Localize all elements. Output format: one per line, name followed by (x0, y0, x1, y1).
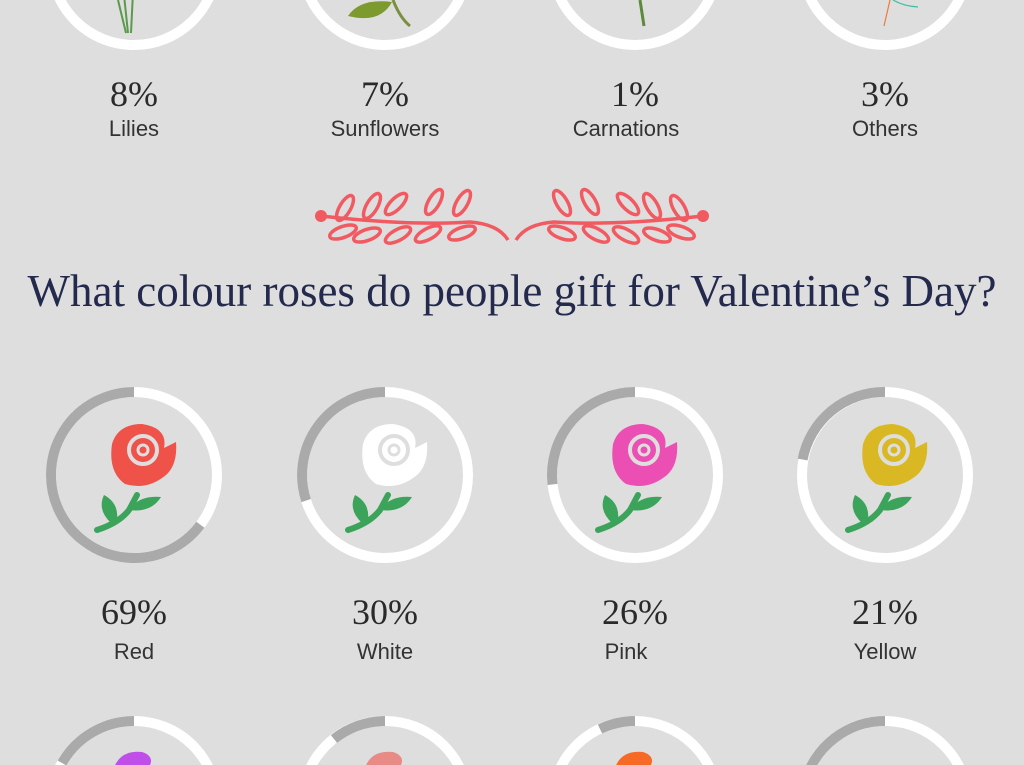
text: pink: 26% (602, 592, 668, 632)
icon: sunflowers ring (302, 0, 468, 45)
title: What colour roses do people gift for Valentine’s Day? (28, 266, 996, 316)
text: red: 69% (101, 592, 167, 632)
text: sunflowers (331, 74, 439, 141)
icon: white rose head (362, 424, 427, 486)
text: white (352, 592, 418, 664)
icon: carnations ring (552, 0, 718, 45)
icon: red rose head (111, 424, 176, 486)
text: yellow: 21% (852, 592, 918, 632)
panel: other flowers row (51, 0, 968, 141)
text: white: 30% (352, 592, 418, 632)
icon: others ring (802, 0, 968, 45)
text: others (852, 74, 918, 141)
text: carnations: 1% (611, 74, 659, 114)
text: lilies: 8% (110, 74, 158, 114)
chart: yellow 21% (802, 392, 968, 558)
text: others: Others (852, 116, 918, 141)
panel: rose colours row 1 (51, 392, 968, 664)
chart: orange (552, 721, 718, 765)
text: red (101, 592, 167, 664)
decoration: laurel branches (315, 187, 709, 246)
text: others: 3% (861, 74, 909, 114)
panel: rose colours row 2 (cut off) (51, 721, 968, 765)
chart: white 30% (302, 392, 468, 558)
icon: yellow rose head (862, 424, 927, 486)
text: yellow (852, 592, 918, 664)
text: lilies (109, 74, 159, 141)
text: yellow: Yellow (854, 639, 917, 664)
chart: red 69% (51, 392, 217, 558)
text: sunflowers: 7% (361, 74, 409, 114)
icon: pink rose head (612, 424, 677, 486)
chart: purple (51, 721, 217, 765)
chart: salmon (302, 721, 468, 765)
chart: pink 26% (552, 392, 718, 558)
text: white: White (357, 639, 413, 664)
text: red: Red (114, 639, 154, 664)
text: pink (602, 592, 668, 664)
text: carnations: Carnations (573, 116, 679, 141)
text: sunflowers: Sunflowers (331, 116, 439, 141)
text: carnations (573, 74, 679, 141)
text: lilies: Lilies (109, 116, 159, 141)
icon: lilies ring (51, 0, 217, 45)
chart: fourth (802, 721, 968, 765)
text: pink: Pink (605, 639, 648, 664)
